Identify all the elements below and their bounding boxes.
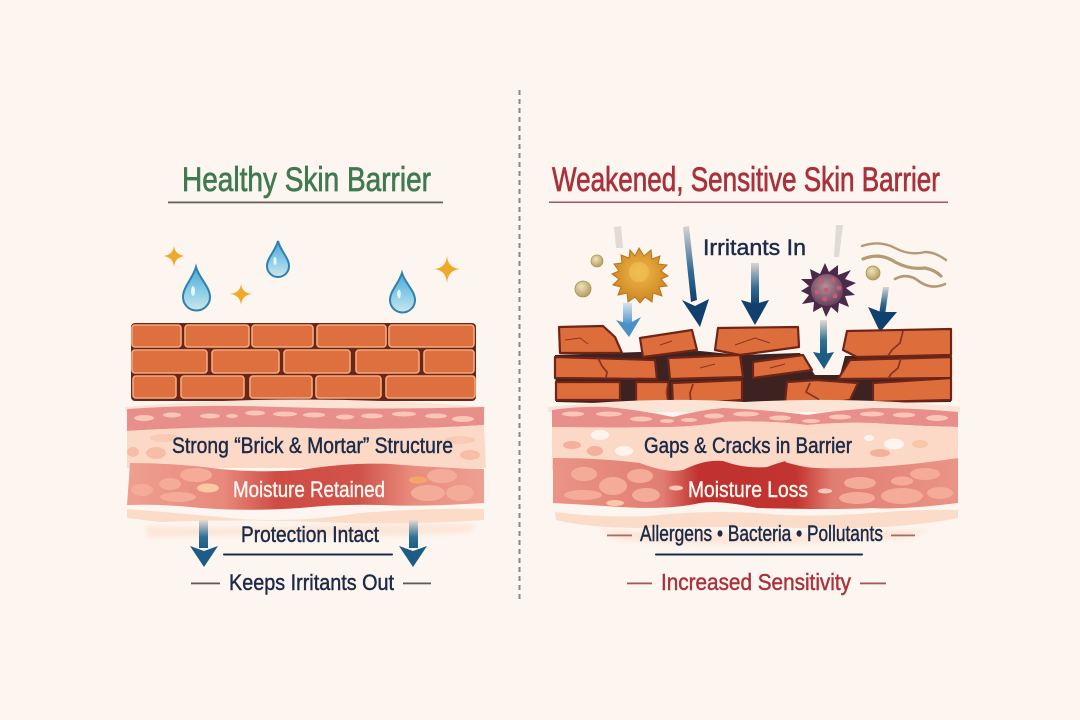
heading: healthy: Healthy Skin Barrier [182, 161, 431, 199]
label: keeps irritants out: Keeps Irritants Out [229, 570, 394, 595]
panel: weakened skin barrier [548, 161, 960, 595]
label: increased sensitivity: Increased Sensitivity [661, 569, 851, 595]
icon: pollutant waves [862, 243, 946, 287]
label: gaps and cracks: Gaps & Cracks in Barrier [644, 433, 852, 458]
brick wall: intact [131, 323, 476, 401]
label: protection intact: Protection Intact [241, 522, 379, 547]
brick wall: broken [555, 326, 951, 406]
icon: pollen [612, 248, 668, 303]
arrow: right down [399, 520, 427, 567]
heading: weakened: Weakened, Sensitive Skin Barrier [552, 161, 940, 199]
center divider [518, 90, 520, 600]
rule: allergens [655, 554, 863, 556]
label: moisture retained: Moisture Retained [233, 477, 385, 502]
rule: protection [223, 554, 393, 556]
label: irritants in: Irritants In [703, 235, 806, 260]
icon: virus [801, 263, 856, 317]
icon: particles [575, 255, 880, 297]
label: moisture loss: Moisture Loss [688, 477, 808, 502]
label: allergens: Allergens • Bacteria • Pollutants [640, 521, 883, 546]
pale streaks [614, 225, 843, 257]
label: brick and mortar: Strong “Brick & Mortar” Structure [172, 433, 453, 458]
skin layers: weakened [548, 400, 960, 544]
arrows: irritants [616, 226, 897, 369]
panel: healthy skin barrier [125, 161, 486, 595]
icon: sparkles [163, 246, 460, 305]
skin layers: healthy [125, 400, 486, 538]
icon: water drops [183, 241, 415, 312]
arrow: left down [190, 520, 218, 567]
